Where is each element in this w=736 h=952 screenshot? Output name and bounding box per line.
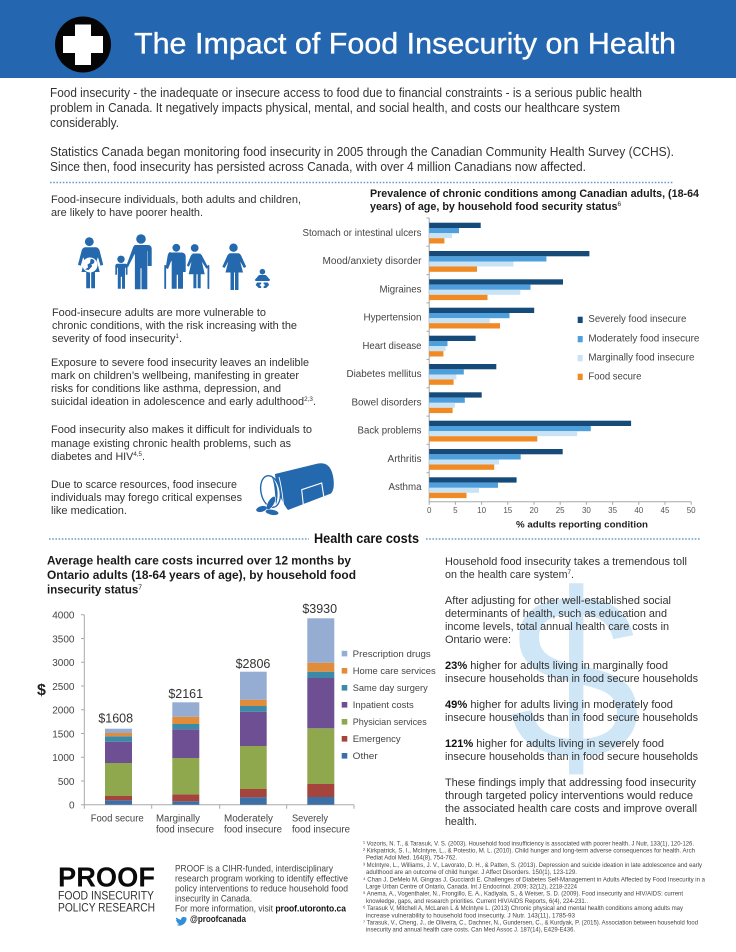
text: health care system findings: insecure households than in food secure households [445, 673, 698, 685]
intro text: Since then, food insecurity has persisted across Canada, with over 4 million Canadians now affected. [50, 160, 586, 174]
stacked bar chart: health care costs [37, 553, 436, 836]
category labels: Diabetes mellitus [346, 369, 422, 380]
text: about PROOF: insecurity in Canada. [175, 894, 252, 904]
axis tick labels [427, 506, 696, 515]
text: chronic conditions: 1 [175, 333, 179, 340]
logo: PROOF: POLICY RESEARCH [58, 900, 155, 914]
y axis labels: 2500 [52, 682, 75, 693]
category labels [91, 814, 351, 836]
category labels [302, 228, 422, 493]
chart title: 6 [617, 201, 621, 208]
category labels: food insecure [292, 825, 351, 836]
text: health care system findings: insecure households than in food secure households [445, 751, 698, 763]
references: ² Kirkpatrick, S. I., McIntyre, L., & Potestio, M. L. (2010). Child hunger and long-term adverse consequences for health. Arch [363, 848, 695, 854]
intro text: Statistics Canada began monitoring food insecurity in 2005 through the Canadian Community Health Survey (CCHS). [50, 145, 674, 159]
y axis labels: 3000 [52, 658, 75, 669]
text: health care system findings: Ontario were: [445, 634, 511, 646]
text: foregoing medication: like medication. [51, 505, 127, 517]
bar: marginally food insecure [172, 702, 199, 805]
legend: Home care services [353, 666, 436, 677]
references: adulthood are an outcome of child hunger. J Affect Disorders. 150(1), 123-129. [366, 869, 577, 876]
icon: child [115, 256, 128, 289]
axis tick labels: 5 [453, 506, 458, 515]
legend: Physician services [353, 717, 427, 728]
axis tick labels: 15 [503, 506, 513, 515]
header banner [0, 0, 736, 78]
axis tick labels: 10 [477, 506, 487, 515]
category labels: Mood/anxiety disorder [322, 256, 422, 267]
y axis labels: 1000 [52, 753, 75, 764]
text: health care system findings: income levels, total annual health care costs in [445, 621, 669, 633]
logo: PROOF [58, 862, 155, 914]
text: health care system findings: 121% higher for adults living in severely food [445, 738, 664, 750]
chart title: Average health care costs incurred over 12 months by [47, 553, 351, 567]
series: food secure [429, 238, 537, 498]
text: health care system findings [445, 556, 698, 828]
chart title: years) of age, by household food security status [370, 201, 623, 213]
text: health care system findings: 49% higher for adults living in moderately food [445, 699, 673, 711]
references: increase vulnerability to household food insecurity. J Nutr. 143(11), 1785-93 [366, 912, 576, 919]
text: health care system findings: 23% higher for adults living in marginally food [445, 660, 668, 672]
watermark: dollar sign: $ [509, 545, 641, 809]
text: chronic conditions: . [179, 333, 182, 345]
logo: PROOF: PROOF [58, 862, 155, 893]
references: Large Urban Centre of Ontario, Canada. Int J Endocrinol. 2009; 32(12), 2218-2224 [366, 884, 578, 890]
text: children's wellbeing: suicidal ideation in adolescence and early adulthood [51, 396, 310, 408]
icon: twitter bird [176, 917, 187, 926]
y axis labels: 4000 [52, 610, 75, 622]
text: about PROOF: PROOF is a CIHR-funded, interdisciplinary [175, 863, 333, 873]
y axis labels: 500 [58, 777, 75, 788]
axis title: % adults reporting condition [516, 520, 648, 530]
intro text: problem in Canada. It negatively impacts physical, mental, and social health, and costs our healthcare system [50, 101, 620, 115]
text: foregoing medication [51, 479, 242, 517]
series: marginally food insecure [429, 233, 577, 493]
references: ⁵ Anema, A., Vogenthaler, N., Frongillo, E. A., Kadiyala, S., & Weiser, S. D. (2009). Food insecurity and HIV/AIDS: current [363, 891, 683, 898]
axis tick labels: 40 [634, 506, 644, 515]
text: health care system findings: . [571, 569, 574, 581]
intro text: considerably. [50, 116, 119, 130]
icon: pregnant woman [78, 237, 103, 288]
text: health care system findings: health. [445, 816, 477, 828]
legend: Other [353, 751, 378, 762]
icon: spilled pill bottle [255, 463, 334, 516]
text: chronic conditions [52, 307, 297, 345]
text: children's wellbeing: . [313, 396, 316, 408]
text: children's wellbeing: 2,3 [304, 396, 313, 403]
references: Pediat Adol Med. 164(8), 754-762. [366, 855, 457, 862]
category labels: Moderately [224, 814, 273, 825]
text: health care system findings: These findings imply that addressing food insecurity [445, 777, 696, 789]
references: ¹ Vozoris, N. T., & Tarasuk, V. S. (2003). Household food insufficiency is associated with poorer health. J Nutr, 133(1), 120-126. [363, 840, 694, 847]
text: about PROOF [175, 863, 348, 926]
references: ⁶ Tarasuk V, Mitchell A, McLaren L & McIntyre L. (2013) Chronic physical and mental health conditions among adults may [363, 905, 684, 912]
references: knowledge, gaps, and research priorities. Current HIV/AIDS Reports, 6(4), 224-231.. [366, 898, 588, 905]
text: children's wellbeing: risks for conditions like asthma, depression, and [51, 383, 281, 395]
bar totals [98, 602, 337, 725]
bar totals: $2806 [236, 657, 270, 671]
text: health care system findings: Household food insecurity takes a tremendous toll [445, 556, 687, 568]
text: health care system findings: insecure households than in food secure households [445, 712, 698, 724]
legend [342, 649, 436, 762]
text: foregoing medication: Due to scarce resources, food insecure [51, 479, 237, 491]
category labels: Migraines [380, 284, 422, 296]
legend: Same day surgery [353, 683, 428, 694]
category labels: Asthma [388, 482, 422, 493]
axis tick labels: 0 [427, 506, 432, 515]
text: chronic conditions: chronic conditions, with the risk increasing with the [52, 320, 297, 332]
icon: man [126, 234, 152, 289]
twitter handle: @proofcanada [190, 914, 247, 924]
text: health care system findings: the associated health care costs and improve overall [445, 803, 697, 815]
chart title [370, 188, 700, 213]
intro text [50, 86, 674, 174]
axes [426, 218, 691, 505]
chart title [47, 553, 356, 597]
category labels: Stomach or intestinal ulcers [302, 228, 422, 239]
y axis labels [52, 610, 75, 812]
chart title: insecurity status [47, 583, 142, 597]
references: ⁴ Chan J, DeMelo M, Gingras J, Gucciardi E. Challenges of Diabetes Self-Management in Adults Affected by Food Insecurity in a [363, 876, 706, 883]
axis tick labels: 25 [556, 506, 565, 515]
legend: Marginally food insecure [588, 353, 695, 364]
bar totals: $3930 [302, 602, 337, 616]
text: poorer health: are likely to have poorer health. [51, 207, 203, 219]
legend [578, 314, 700, 383]
chart title: Ontario adults (18-64 years of age), by household food [47, 568, 356, 582]
series: moderately food insecure [429, 228, 591, 488]
category labels: food insecure [224, 825, 283, 836]
category labels: Back problems [358, 426, 422, 436]
intro text: Food insecurity - the inadequate or insecure access to food due to financial constraints - is a serious public health [50, 86, 642, 100]
legend: Food secure [588, 372, 642, 383]
legend: Severely food insecure [588, 314, 687, 325]
text: managing chronic problems: manage existing chronic health problems, such as [51, 438, 291, 450]
chart title: Prevalence of chronic conditions among Canadian adults, (18-64 [370, 188, 700, 200]
bar: food secure [105, 729, 132, 805]
text: health care system findings: through targeted policy interventions would reduce [445, 790, 693, 802]
text: managing chronic problems: . [142, 451, 145, 463]
series: severely food insecure [429, 223, 631, 483]
text: poorer health [51, 194, 301, 219]
y axis labels: 0 [69, 800, 75, 812]
bar totals: $1608 [98, 711, 133, 725]
title: The Impact of Food Insecurity on Health [134, 28, 676, 60]
references: insecurity and annual health care costs. Can Med Assoc J. 187(14), E429-E436. [366, 927, 575, 934]
text: managing chronic problems: Food insecurity also makes it difficult for individuals to [51, 424, 312, 436]
category labels: Marginally [156, 814, 200, 825]
category labels: Hypertension [364, 313, 422, 324]
icon: elderly woman with cane [187, 244, 209, 289]
axis tick labels: 45 [661, 506, 670, 515]
references: ⁷ Tarasuk, V., Cheng, J., de Oliveira, C., Dachner, N., Gundersen, C., & Kurdyak, P. (2015). Association between household food [363, 920, 698, 926]
category labels: Food secure [91, 814, 144, 825]
text: poorer health: Food-insecure individuals, both adults and children, [51, 194, 301, 206]
legend: Inpatient costs [353, 700, 414, 711]
references [363, 840, 706, 934]
axis tick labels: 35 [608, 506, 618, 515]
axes [81, 615, 354, 809]
text: chronic conditions: severity of food insecurity [52, 333, 178, 345]
references: ³ McIntyre, L., Williams, J. V., Lavorato, D. H., & Patten, S. (2013). Depression and suicide ideation in late adolescence and early [363, 862, 703, 869]
text: managing chronic problems [51, 424, 312, 463]
text: children's wellbeing: mark on children’s wellbeing, manifesting in greater [51, 370, 299, 382]
text: health care system findings: determinants of health, such as education and [445, 608, 667, 620]
text: managing chronic problems: 4,5 [133, 451, 142, 458]
legend: Prescription drugs [353, 649, 431, 660]
section heading: health care costs: Health care costs [314, 530, 419, 546]
bar: severely food insecure [307, 618, 334, 805]
text: about PROOF: policy interventions to reduce household food [175, 884, 348, 894]
category labels: Arthritis [388, 454, 422, 465]
bar chart: chronic conditions [302, 188, 700, 530]
text: about PROOF: research program working to identify effective [175, 873, 348, 883]
y axis labels: 1500 [52, 729, 75, 740]
chart title: 7 [138, 585, 142, 592]
axis tick labels: 30 [582, 506, 591, 515]
text: health care system findings: on the health care system [445, 569, 573, 581]
text: about PROOF: For more information, visit proof.utoronto.ca [175, 904, 347, 914]
text: children's wellbeing: Exposure to severe food insecurity leaves an indelible [51, 357, 309, 369]
text: chronic conditions: Food-insecure adults are more vulnerable to [52, 307, 266, 319]
icon: baby [255, 269, 270, 288]
category labels: Severely [292, 814, 328, 825]
category labels: Bowel disorders [352, 397, 422, 408]
icon: woman [222, 244, 246, 290]
text: health care system findings: 7 [568, 569, 571, 576]
legend: Moderately food insecure [588, 334, 700, 345]
icon: medical cross [55, 16, 111, 72]
y axis labels: 3500 [52, 634, 75, 645]
logo: PROOF: FOOD INSECURITY [58, 889, 154, 903]
axis tick labels: 50 [687, 506, 696, 515]
category labels: food insecure [156, 825, 215, 836]
category labels: Heart disease [362, 341, 422, 352]
text: foregoing medication: individuals may forego critical expenses [51, 492, 242, 504]
icons: family figures [78, 234, 270, 290]
text: health care system findings: After adjusting for other well-established social [445, 595, 671, 607]
icon: elderly man with cane [164, 244, 186, 289]
text: managing chronic problems: diabetes and HIV [51, 451, 137, 463]
text: children's wellbeing [51, 357, 316, 408]
axis tick labels: 20 [530, 506, 539, 515]
legend: Emergency [353, 734, 401, 745]
bar totals: $2161 [168, 687, 203, 701]
y axis labels: 2000 [52, 706, 75, 716]
bar: moderately food insecure [240, 672, 267, 805]
y axis title: $ [37, 682, 46, 699]
